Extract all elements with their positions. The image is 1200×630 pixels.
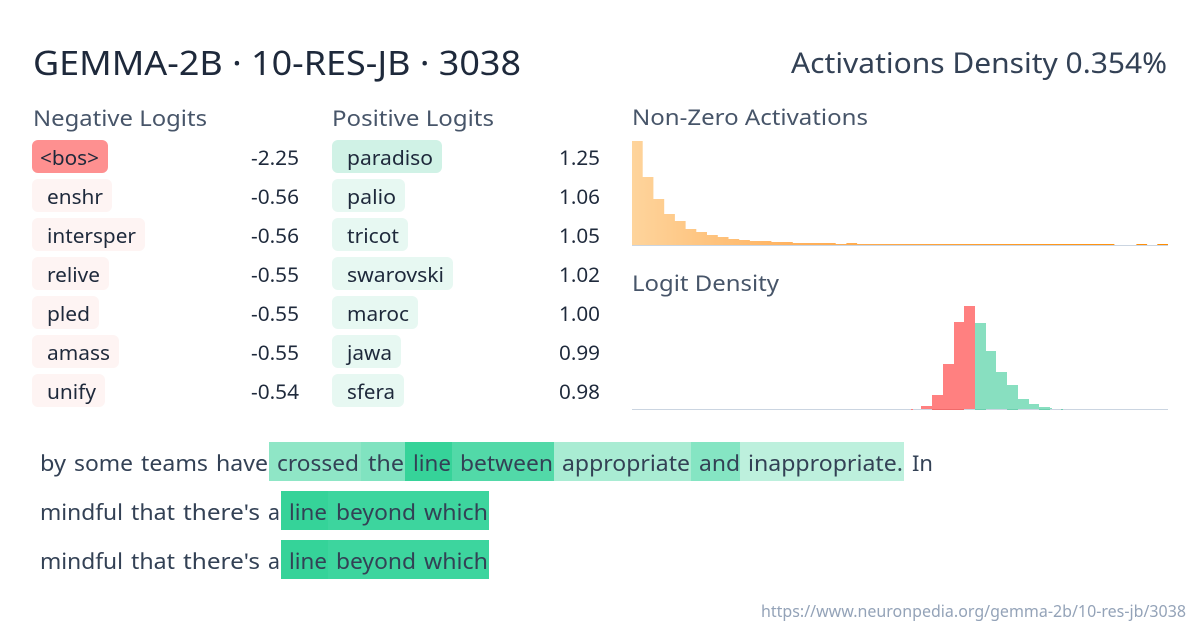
row: tricot xyxy=(332,218,600,251)
row: swarovski xyxy=(332,257,600,290)
example 2: which xyxy=(424,498,488,527)
row: unify: -0.54 xyxy=(251,377,299,405)
row: intersper: intersper xyxy=(47,221,137,249)
example 3: that xyxy=(131,547,175,576)
heading: logit density: Logit Density xyxy=(632,268,780,298)
row: paradiso: 1.25 xyxy=(559,143,600,171)
example 1: appropriate xyxy=(562,449,690,478)
row: pled: -0.55 xyxy=(251,299,299,327)
row: jawa xyxy=(332,335,600,368)
row: intersper: -0.56 xyxy=(251,221,299,249)
negative bars xyxy=(911,306,975,410)
row: bos: -2.25 xyxy=(251,143,299,171)
row: sfera: sfera xyxy=(347,377,395,405)
example 2 xyxy=(40,491,489,530)
row: swarovski: swarovski xyxy=(347,260,444,288)
example 3: mindful xyxy=(40,547,123,576)
example 1: line xyxy=(413,449,451,478)
example 1: have xyxy=(216,449,268,478)
row: paradiso: paradiso xyxy=(347,143,433,171)
heading: positive logits: Positive Logits xyxy=(332,103,494,133)
row: sfera: 0.98 xyxy=(559,377,600,405)
row: palio: palio xyxy=(347,182,396,210)
example 1: In xyxy=(912,449,933,478)
positive bars xyxy=(975,323,1063,410)
example 1: teams xyxy=(141,449,208,478)
example 1: some xyxy=(74,449,133,478)
activations density: Activations Density 0.354% xyxy=(791,44,1167,82)
row: swarovski: 1.02 xyxy=(559,260,600,288)
example 2: there's xyxy=(183,498,260,527)
row: intersper xyxy=(32,218,299,251)
row: pled: pled xyxy=(47,299,90,327)
row: relive: -0.55 xyxy=(251,260,299,288)
row: amass xyxy=(32,335,299,368)
row: maroc: 1.00 xyxy=(559,299,600,327)
row: enshr: -0.56 xyxy=(251,182,299,210)
row: pled xyxy=(32,296,299,329)
example 3 xyxy=(40,540,489,579)
row: tricot: tricot xyxy=(347,221,399,249)
row: bos: <bos> xyxy=(40,143,99,171)
row: amass: amass xyxy=(47,338,110,366)
example 2: mindful xyxy=(40,498,123,527)
row: enshr: enshr xyxy=(47,182,104,210)
example 1 xyxy=(40,442,933,481)
row: maroc xyxy=(332,296,600,329)
example 3: there's xyxy=(183,547,260,576)
example 1: the xyxy=(368,449,404,478)
heading: non-zero activations: Non-Zero Activations xyxy=(632,102,868,132)
example 1: crossed xyxy=(277,449,359,478)
row: unify xyxy=(32,374,299,407)
example 1: between xyxy=(460,449,553,478)
example 3: which xyxy=(424,547,488,576)
example 2: that xyxy=(131,498,175,527)
panel: negative logits xyxy=(32,103,299,407)
row: jawa: 0.99 xyxy=(559,338,600,366)
title: GEMMA-2B · 10-RES-JB · 3038 xyxy=(33,39,521,85)
chart: logit density histogram xyxy=(632,306,1168,410)
row: palio xyxy=(332,179,600,212)
row: relive: relive xyxy=(47,260,100,288)
panel: positive logits xyxy=(332,103,600,407)
row: maroc: maroc xyxy=(347,299,409,327)
row: palio: 1.06 xyxy=(559,182,600,210)
row: unify: unify xyxy=(47,377,97,405)
example 3: line xyxy=(289,547,327,576)
example 1: by xyxy=(40,449,67,478)
row: tricot: 1.05 xyxy=(559,221,600,249)
example 1: inappropriate. xyxy=(748,449,903,478)
heading: negative logits: Negative Logits xyxy=(33,103,207,133)
chart: non-zero activations histogram xyxy=(632,141,1168,246)
row: paradiso xyxy=(332,140,600,173)
source url: https://www.neuronpedia.org/gemma-2b/10-res-jb/3038 xyxy=(761,600,1186,622)
example 2: a xyxy=(268,498,280,527)
row: bos xyxy=(32,140,299,173)
example 3: beyond xyxy=(336,547,416,576)
example 2: line xyxy=(289,498,327,527)
row: relive xyxy=(32,257,299,290)
row: sfera xyxy=(332,374,600,407)
example 2: beyond xyxy=(336,498,416,527)
row: jawa: jawa xyxy=(345,338,392,366)
example 1: and xyxy=(699,449,740,478)
row: amass: -0.55 xyxy=(251,338,299,366)
example 3: a xyxy=(268,547,280,576)
row: enshr xyxy=(32,179,299,212)
